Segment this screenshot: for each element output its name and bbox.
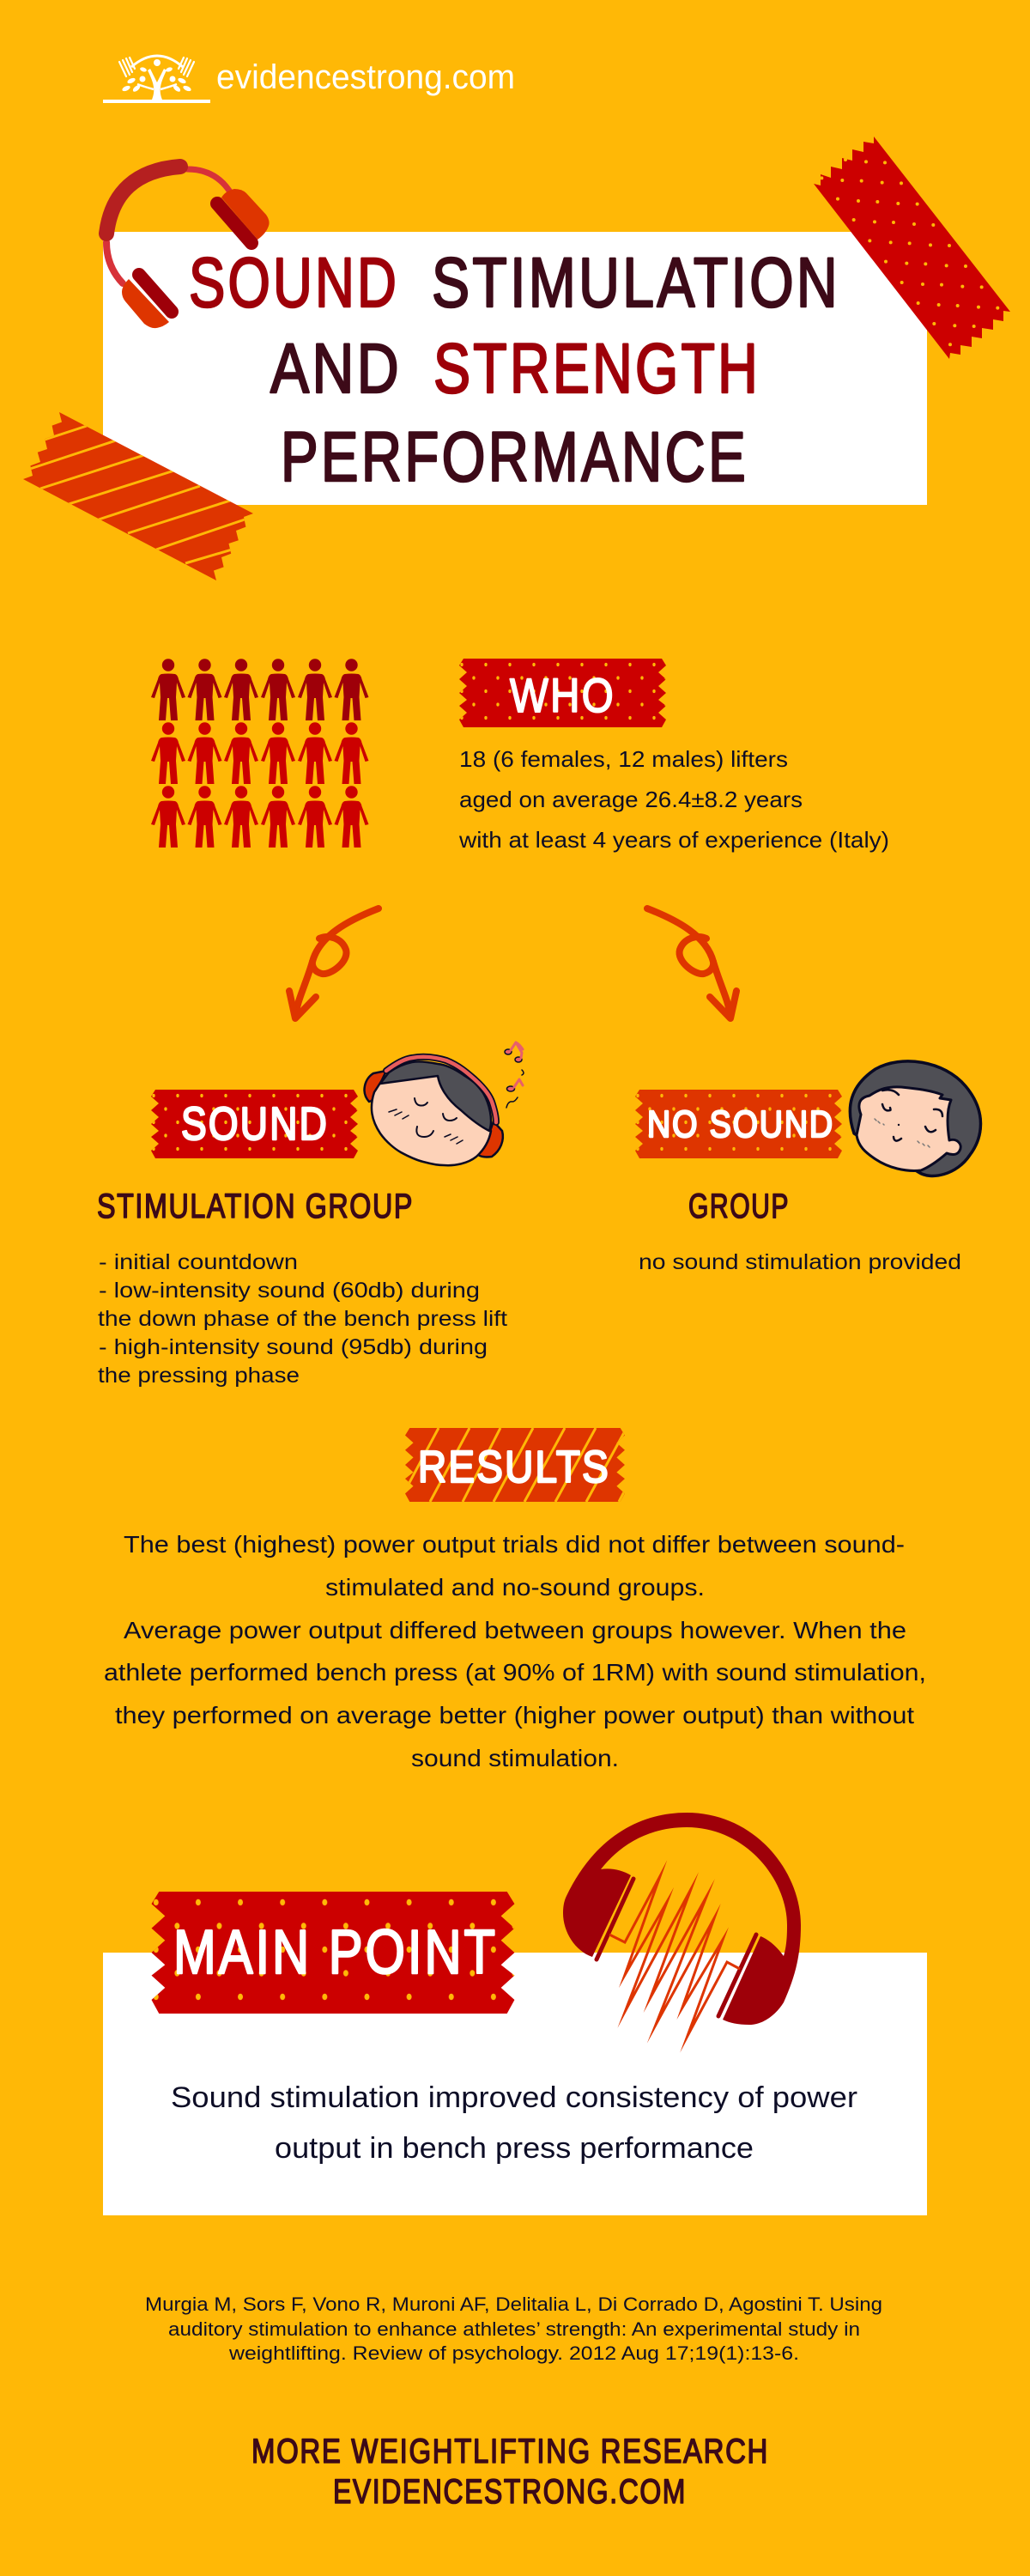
text block: participants: aged on average 26.4±8.2 years: [459, 787, 803, 812]
title: SOUND: [189, 244, 399, 322]
logo: evidencestrong.com: evidencestrong.com: [216, 58, 515, 96]
title: STRENGTH: [433, 330, 760, 408]
logo: evidencestrong.com: [103, 56, 515, 103]
text block: no sound protocol: no sound stimulation provided: [639, 1250, 961, 1274]
text block: stimulation protocol: - initial countdown: [99, 1250, 298, 1274]
footer call to action: EVIDENCESTRONG.COM: [333, 2473, 687, 2511]
arrow: to sound group: [289, 908, 379, 1018]
icon: grid of 18 people: [151, 659, 369, 848]
text block: main point: [171, 2081, 857, 2165]
text block: results: Average power output differed between groups however. When the: [124, 1617, 906, 1643]
text block: citation: weightlifting. Review of psychology. 2012 Aug 17;19(1):13-6.: [228, 2342, 799, 2364]
decorative tape: orange striped: [23, 412, 253, 580]
heading: stimulation group: STIMULATION GROUP: [97, 1188, 414, 1225]
panel: title card: [103, 232, 927, 505]
text block: stimulation protocol: - high-intensity sound (95db) during: [99, 1335, 488, 1359]
text block: results: [104, 1531, 926, 1771]
icon: large headphones with sound wave: [563, 1813, 801, 2036]
text block: results: sound stimulation.: [411, 1745, 619, 1771]
text block: stimulation protocol: - low-intensity sound (60db) during: [99, 1279, 480, 1303]
label tape: SOUND: SOUND: [181, 1098, 329, 1150]
text block: citation: [145, 2293, 882, 2364]
text block: stimulation protocol: [98, 1250, 507, 1388]
icon: barbell tree: [103, 56, 210, 103]
text block: participants: with at least 4 years of experience (Italy): [458, 827, 889, 853]
text block: participants: 18 (6 females, 12 males) lifters: [459, 746, 788, 772]
text block: results: athlete performed bench press (at 90% of 1RM) with sound stimulation,: [104, 1659, 926, 1686]
label tape: SOUND: [151, 1090, 358, 1158]
label tape: MAIN POINT: MAIN POINT: [173, 1918, 498, 1987]
footer call to action: [251, 2433, 769, 2511]
footer call to action: MORE WEIGHTLIFTING RESEARCH: [251, 2433, 769, 2470]
label tape: MAIN POINT: [151, 1892, 514, 2014]
title: AND: [270, 330, 402, 408]
text block: main point: Sound stimulation improved consistency of power: [171, 2081, 857, 2114]
text block: citation: Murgia M, Sors F, Vono R, Muroni AF, Delitalia L, Di Corrado D, Agostini T. Using: [145, 2293, 882, 2315]
icon: headphones on title card: [106, 167, 270, 328]
text block: stimulation protocol: the pressing phase: [98, 1364, 300, 1388]
text block: results: The best (highest) power output trials did not differ between sound-: [124, 1531, 905, 1558]
text block: results: stimulated and no-sound groups.: [325, 1574, 705, 1601]
title: [189, 244, 840, 496]
decorative tape: red dotted: [814, 137, 1010, 359]
title: PERFORMANCE: [281, 418, 748, 496]
label tape: RESULTS: [405, 1428, 625, 1502]
icon: face with headphones: [365, 1042, 524, 1165]
icon: face without headphones: [850, 1061, 980, 1176]
label tape: NO SOUND: [635, 1090, 842, 1158]
text block: stimulation protocol: the down phase of the bench press lift: [98, 1307, 507, 1331]
text block: main point: output in bench press performance: [275, 2132, 754, 2165]
label tape: WHO: [459, 659, 666, 727]
label tape: RESULTS: RESULTS: [418, 1443, 610, 1492]
arrow: to no sound group: [647, 908, 736, 1018]
text block: participants: [458, 746, 889, 853]
text block: citation: auditory stimulation to enhance athletes’ strength: An experimental study in: [168, 2318, 860, 2340]
label tape: WHO: WHO: [510, 668, 615, 722]
heading: no sound group: GROUP: [688, 1188, 790, 1225]
title: STIMULATION: [432, 244, 840, 322]
text block: results: they performed on average better (higher power output) than without: [115, 1702, 914, 1728]
icon: music notes: [505, 1042, 524, 1108]
label tape: NO SOUND: NO SOUND: [647, 1103, 834, 1145]
panel: main point card: [103, 1953, 927, 2215]
